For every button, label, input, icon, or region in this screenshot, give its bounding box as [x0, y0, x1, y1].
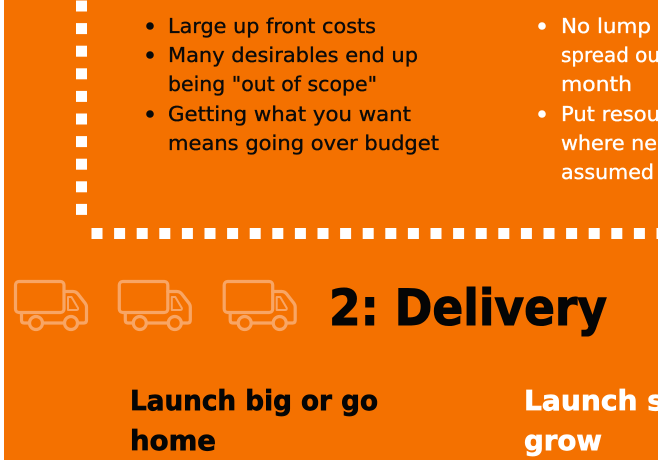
- bullet list: drawbacks (black): Many desirables end up: [168, 43, 418, 67]
- subheading: launch big (black): [130, 384, 378, 457]
- bullet list: benefits (white): assumed: [561, 160, 654, 184]
- bullet list: drawbacks (black): Getting what you want: [168, 102, 411, 126]
- bullet list: benefits (white): month: [561, 72, 632, 96]
- bullet list: benefits (white): No lump: [561, 14, 651, 38]
- icon: delivery trucks: [16, 282, 295, 330]
- bullet list: drawbacks (black): [146, 14, 439, 155]
- subheading: launch small (white): grow: [524, 424, 602, 457]
- bullet list: benefits (white): where ne: [561, 131, 657, 155]
- subheading: launch small (white): [524, 384, 658, 457]
- bullet list: benefits (white): Put resou: [561, 102, 658, 126]
- bullet list: drawbacks (black): Large up front costs: [168, 14, 376, 38]
- subheading: launch big (black): home: [130, 424, 216, 457]
- left page edge: [0, 0, 4, 460]
- bullet list: drawbacks (black): means going over budget: [168, 131, 439, 155]
- bullet list: drawbacks (black): being "out of scope": [168, 72, 377, 96]
- subheading: launch big (black): Launch big or go: [130, 384, 378, 417]
- bullet list: benefits (white): [538, 14, 658, 184]
- section heading: 2: Delivery: 2: Delivery: [329, 279, 607, 337]
- dotted frame: [76, 0, 658, 239]
